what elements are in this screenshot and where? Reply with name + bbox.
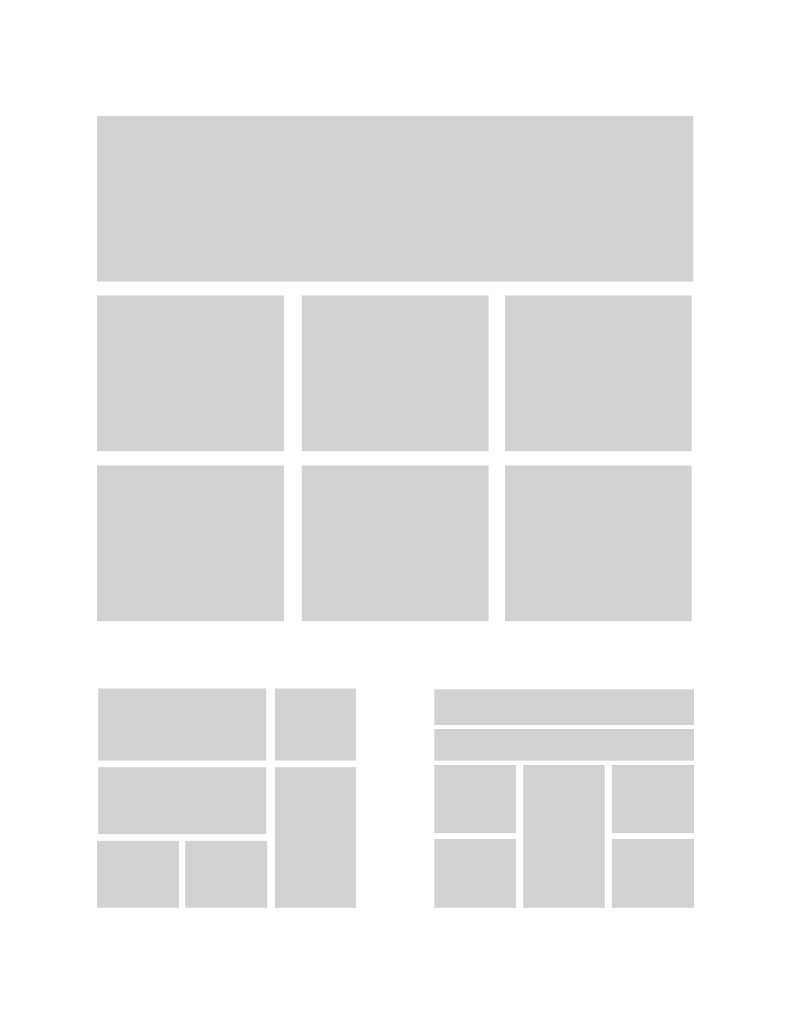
block: right tall xyxy=(275,767,356,908)
panel: bottom right layout group xyxy=(434,689,694,908)
panel: row 2 column 1 xyxy=(97,466,284,621)
block: lower left small xyxy=(97,841,179,908)
panel: row 2 column 3 xyxy=(505,466,692,621)
block: second bar xyxy=(434,729,694,761)
panel: row 1 column 3 xyxy=(505,296,692,451)
block: left lower xyxy=(434,839,516,908)
panel: bottom left layout group xyxy=(97,688,356,908)
block: lower middle small xyxy=(185,841,267,908)
block: top bar xyxy=(434,689,694,725)
block: right upper xyxy=(612,765,694,833)
block: upper left wide xyxy=(98,688,266,760)
block: left upper xyxy=(434,765,516,833)
block: upper right small xyxy=(275,688,356,760)
panel: row 1 column 2 xyxy=(302,296,489,451)
panel: top wide banner xyxy=(97,116,693,282)
panel: row 2 column 2 xyxy=(302,466,489,621)
block: middle left wide xyxy=(98,767,266,834)
block: right lower xyxy=(612,839,694,908)
block: centre tall xyxy=(523,765,605,908)
panel: row 1 column 1 xyxy=(97,296,284,451)
